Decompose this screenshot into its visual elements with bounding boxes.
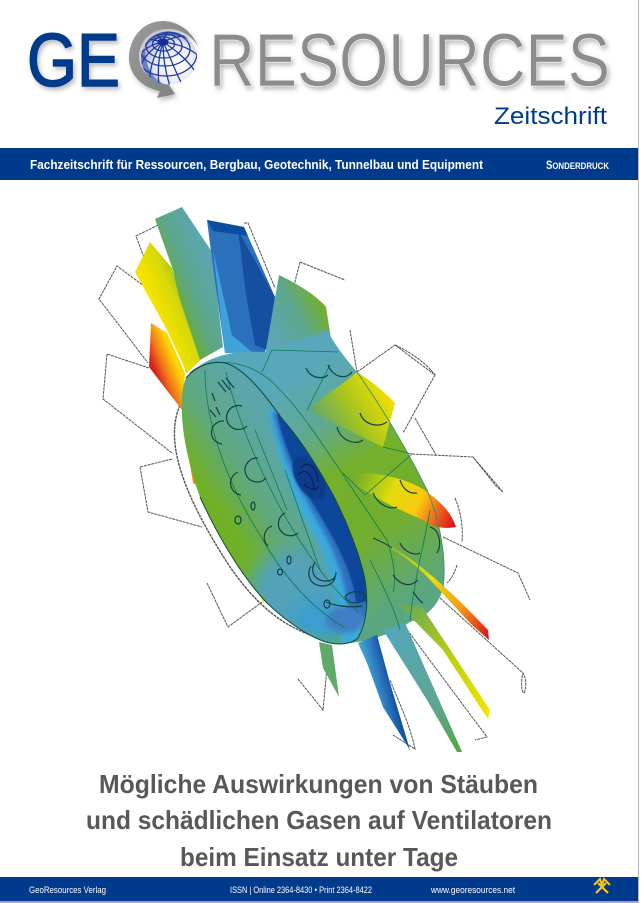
blade: small yellow	[253, 577, 269, 603]
blade: yellow green long	[397, 603, 490, 719]
subtitle: Zeitschrift: Zeitschrift	[494, 103, 607, 130]
label: Sonderdruck: SONDERDRUCK	[546, 160, 609, 172]
body contours and scalloped details	[186, 350, 444, 644]
blade: red upper	[149, 323, 185, 410]
blade: teal long	[383, 623, 462, 752]
right page edge line	[638, 0, 639, 903]
blade: orange tip behind body	[186, 438, 205, 490]
wireframe outlines of blades	[99, 220, 530, 749]
footer: ISSN: ISSN | Online 2364-8430 • Print 2364-8422	[230, 885, 372, 896]
blade: teal green upper right	[262, 275, 332, 372]
footer: publisher: GeoResources Verlag	[29, 885, 106, 896]
body: front face with blue crescent	[182, 363, 366, 644]
blade: small green	[319, 642, 339, 697]
icon: wire globe	[141, 32, 197, 84]
title line 1: Mögliche Auswirkungen von Stäuben	[99, 769, 538, 799]
illustration: fan impeller simulation	[99, 207, 530, 752]
icon: crossed mining hammers	[594, 879, 610, 893]
body: outer rim	[186, 330, 444, 643]
article title	[86, 769, 552, 872]
footer band	[0, 877, 638, 903]
blade: yellow red slim	[373, 538, 489, 640]
blade: deep blue upper	[207, 220, 275, 353]
logo word: GE: GE	[27, 18, 120, 102]
blade: yellow upper	[135, 242, 200, 373]
blade: green teal upper	[155, 207, 223, 373]
header band	[0, 148, 638, 180]
icon: grey arrow ring around globe	[129, 21, 198, 98]
blade: orange red right	[343, 473, 456, 528]
logo: GeoResources	[27, 18, 610, 102]
title line 3: beim Einsatz unter Tage	[180, 842, 458, 872]
tagline: Fachzeitschrift für Ressourcen, Bergbau, Geotechnik, Tunnelbau und Equipment	[30, 157, 484, 172]
title line 2: und schädlichen Gasen auf Ventilatoren	[86, 805, 552, 835]
blade: blue long	[358, 635, 410, 750]
footer: website: www.georesources.net	[430, 885, 515, 896]
blade: yellow right	[307, 372, 395, 447]
